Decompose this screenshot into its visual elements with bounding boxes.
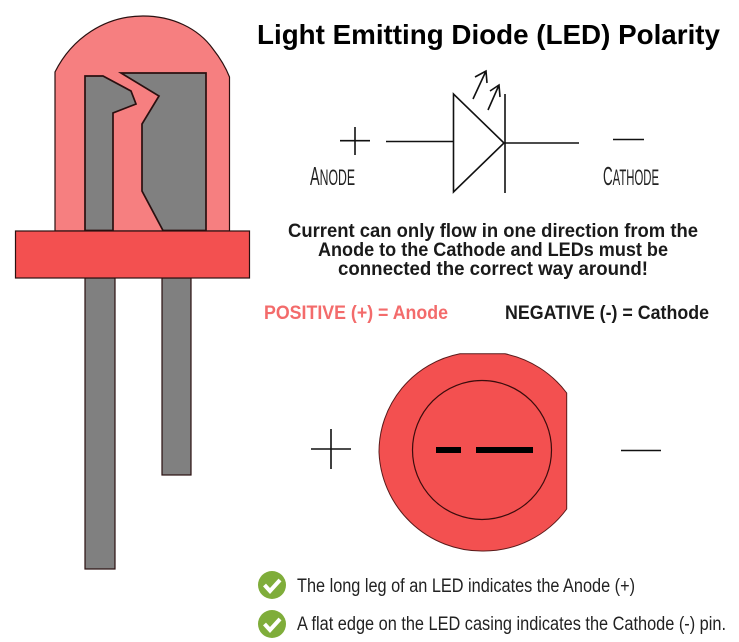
list item: long leg bbox=[258, 571, 635, 599]
anode wire bbox=[386, 140, 453, 142]
anode label: ANODE bbox=[310, 161, 355, 191]
diagram: LED top view bbox=[379, 354, 567, 551]
short internal dash bbox=[436, 447, 461, 453]
anode plus sign bbox=[340, 127, 370, 155]
inner lens circle bbox=[412, 380, 552, 520]
anode internal post bbox=[85, 76, 136, 230]
negative cathode label: NEGATIVE (-) = Cathode bbox=[505, 302, 709, 324]
explanation text bbox=[288, 221, 698, 280]
casing with flat edge bbox=[379, 354, 567, 551]
LED base rim bbox=[16, 231, 250, 278]
explanation text: Anode to the Cathode and LEDs must be bbox=[318, 240, 668, 261]
title: Light Emitting Diode (LED) Polarity bbox=[257, 19, 720, 50]
plus sign bbox=[311, 429, 351, 469]
icon: check mark bbox=[258, 610, 286, 638]
long internal dash bbox=[476, 447, 533, 453]
list item: flat edge bbox=[258, 610, 726, 638]
long anode leg bbox=[85, 278, 115, 569]
short cathode leg bbox=[162, 278, 191, 475]
LED dome bbox=[55, 16, 230, 231]
light arrow one bbox=[473, 71, 487, 99]
explanation text: Current can only flow in one direction from the bbox=[288, 221, 698, 242]
illustration: LED side view bbox=[16, 16, 250, 569]
long leg text: The long leg of an LED indicates the Anode (+) bbox=[297, 576, 635, 597]
cathode bar bbox=[504, 94, 506, 193]
diode triangle bbox=[454, 94, 504, 192]
explanation text: connected the correct way around! bbox=[338, 259, 648, 280]
light arrow two bbox=[488, 85, 500, 110]
cathode internal anvil bbox=[121, 73, 206, 230]
cathode wire bbox=[505, 142, 579, 144]
cathode label: CATHODE bbox=[603, 161, 659, 191]
minus sign bbox=[621, 450, 661, 452]
positive anode label: POSITIVE (+) = Anode bbox=[264, 302, 448, 324]
diagram: LED circuit symbol bbox=[340, 71, 644, 193]
cathode minus sign bbox=[613, 138, 644, 140]
icon: check mark bbox=[258, 571, 286, 599]
